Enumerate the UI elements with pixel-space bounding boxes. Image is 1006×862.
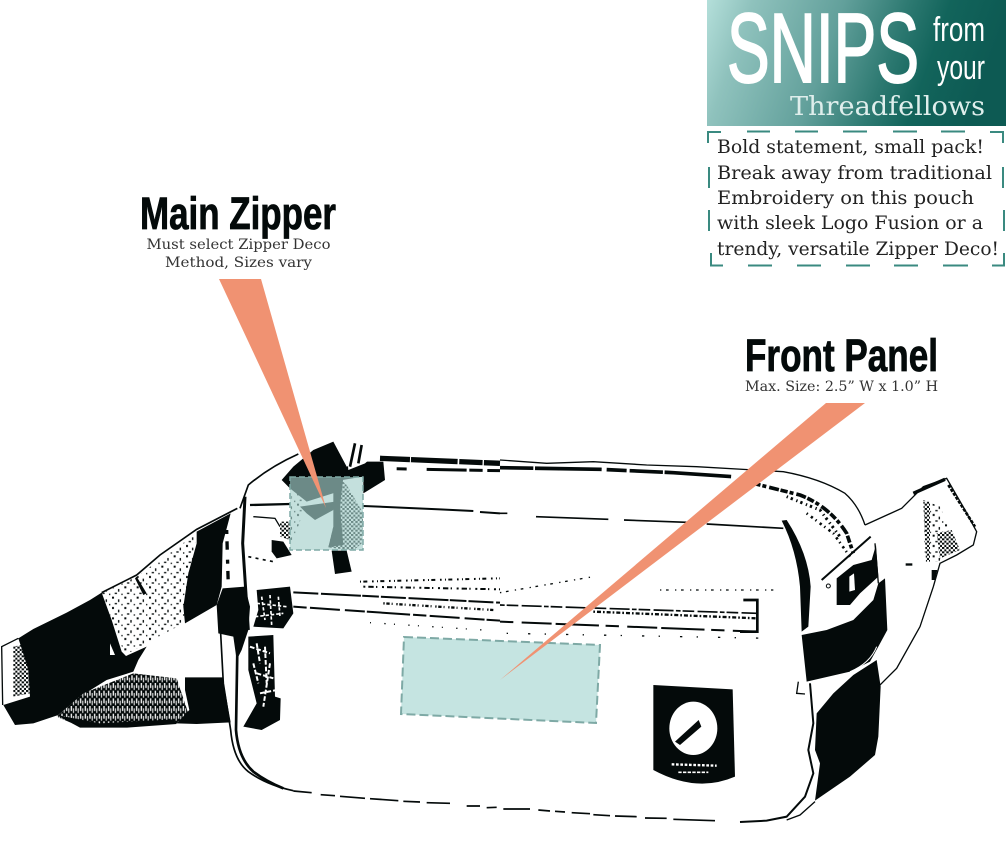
heading: front panel: Front Panel — [745, 330, 938, 381]
description text: trendy, versatile Zipper Deco! — [717, 238, 999, 260]
banner text: from your: your — [937, 49, 985, 87]
arrow: front panel pointer — [500, 403, 865, 680]
caption: main zipper — [146, 237, 330, 271]
description text: Bold statement, small pack! — [717, 136, 984, 158]
caption: main zipper: Must select Zipper Deco — [146, 237, 330, 253]
heading: front panel — [745, 330, 938, 395]
description box — [708, 132, 1004, 266]
description text: Embroidery on this pouch — [717, 187, 974, 209]
description text: with sleek Logo Fusion or a — [717, 212, 983, 234]
banner text: Threadfellows: Threadfellows — [790, 92, 985, 122]
header banner — [707, 0, 1006, 126]
placement box: main zipper — [290, 477, 363, 550]
product illustration: hip pack — [2, 438, 977, 822]
description text: Break away from traditional — [717, 162, 992, 184]
left strap and left side of pack — [2, 438, 500, 808]
caption: main zipper: Method, Sizes vary — [165, 255, 312, 271]
caption: front panel: Max. Size: 2.5” W x 1.0” H — [745, 379, 938, 395]
heading: main zipper: Main Zipper — [140, 188, 336, 239]
placement box: front panel — [401, 637, 600, 723]
woven logo patch — [653, 685, 735, 784]
banner text: from your — [933, 11, 985, 87]
heading: main zipper — [140, 188, 336, 271]
right strap and right side of pack — [500, 460, 977, 822]
banner text: from your: from — [933, 11, 985, 49]
description text — [717, 136, 999, 260]
arrow: main zipper pointer — [219, 279, 326, 508]
